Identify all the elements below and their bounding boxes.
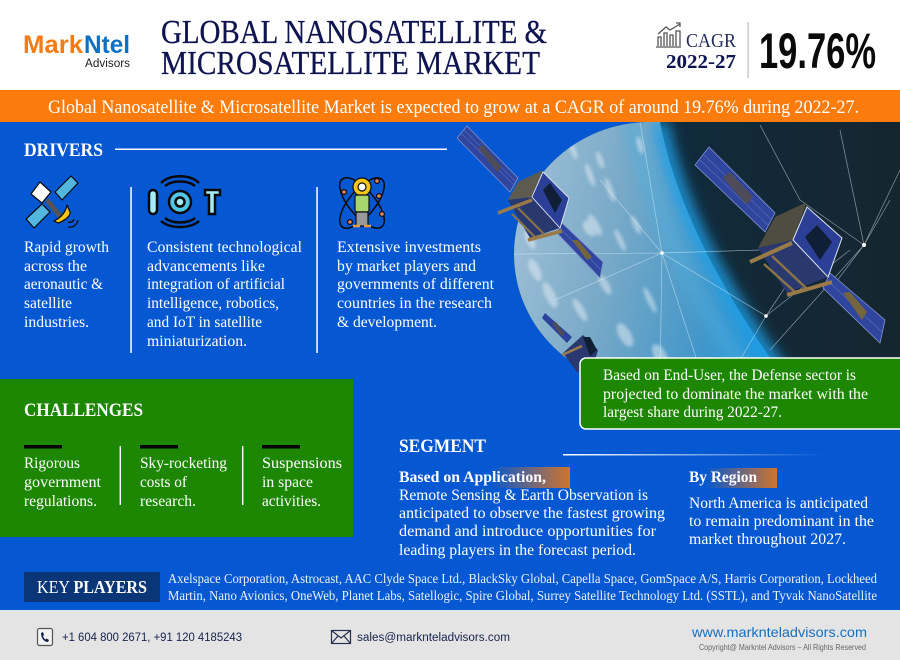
key players label: [24, 572, 160, 602]
driver text: investments: governments of different: [337, 276, 495, 293]
icon: growth chart: [656, 23, 681, 47]
segment: application: demand and introduce opportunities for: [399, 523, 657, 540]
icon: phone: [38, 628, 52, 646]
icon: person with atom orbit: [332, 171, 392, 235]
challenge: research costs: Sky-rocketing: [140, 455, 227, 472]
logo: MarkNtel Advisors: Mark: [23, 31, 83, 59]
orange banner: Global Nanosatellite & Microsatellite Market is expected to grow at a CAGR of around 19.76% during 2022-27.: [48, 98, 859, 118]
driver text: rapid growth: industries.: [24, 314, 89, 331]
key players list: [168, 572, 877, 604]
driver text: rapid growth: across the: [24, 258, 87, 275]
CAGR block: CAGR: [686, 30, 737, 52]
driver text: technological advancements: intelligence, robotics,: [147, 295, 279, 312]
driver text: rapid growth: Rapid growth: [24, 239, 109, 256]
segment: application: Based on Application,: [399, 469, 546, 486]
title: [161, 14, 547, 82]
driver text: rapid growth: aeronautic &: [24, 276, 104, 293]
footer: [0, 610, 900, 660]
challenge: regulations: Rigorous: [24, 455, 80, 472]
logo: MarkNtel Advisors: Ntel: [84, 31, 130, 59]
logo: MarkNtel Advisors: [23, 31, 130, 70]
key players label: KEY PLAYERS: [37, 577, 147, 597]
driver text: technological advancements: and IoT in satellite: [147, 314, 262, 331]
callout: end-user defense: Based on End-User, the Defense sector is: [603, 367, 856, 384]
footer: sales@marknteladvisors.com: [357, 632, 510, 644]
challenge: research costs: research.: [140, 493, 196, 510]
driver text: technological advancements: integration of artificial: [147, 276, 286, 293]
challenge: suspensions: activities.: [262, 493, 321, 510]
callout: end-user defense: [580, 358, 900, 429]
CAGR block: 2022-27: [666, 51, 736, 73]
orange banner: [0, 90, 900, 122]
icon: satellite: [26, 176, 78, 228]
driver text: technological advancements: miniaturization.: [147, 333, 247, 350]
satellite: small lower: [542, 313, 598, 372]
segment: application: Remote Sensing & Earth Observation is: [399, 487, 648, 504]
driver text: rapid growth: satellite: [24, 295, 72, 312]
segment: application: [399, 467, 665, 559]
challenge: research costs: costs of: [140, 474, 188, 491]
driver text: investments: countries in the research: [337, 295, 492, 312]
satellite: upper right: [695, 147, 885, 343]
driver text: investments: by market players and: [337, 258, 476, 275]
segment heading: SEGMENT: [399, 436, 486, 457]
driver text: technological advancements: [147, 239, 303, 350]
challenge: suspensions: Suspensions: [262, 455, 342, 472]
icon: IoT: [149, 176, 220, 227]
driver text: investments: & development.: [337, 314, 437, 331]
icon: envelope: [332, 630, 350, 644]
segment: region: [689, 468, 874, 548]
challenge: regulations: [24, 455, 102, 510]
challenge: suspensions: [262, 455, 342, 510]
driver text: rapid growth: [24, 239, 109, 331]
driver text: investments: Extensive investments: [337, 239, 481, 256]
logo: MarkNtel Advisors: Advisors: [85, 58, 130, 70]
segment: application: leading players in the forecast period.: [399, 542, 636, 559]
segment: application: anticipated to observe the fastest growing: [399, 505, 665, 522]
driver text: technological advancements: Consistent technological: [147, 239, 303, 256]
challenges heading: CHALLENGES: [24, 400, 143, 421]
footer: www.marknteladvisors.com: [691, 624, 867, 640]
challenge: research costs: [140, 455, 227, 510]
earth and space image: [514, 122, 900, 359]
segment: region: North America is anticipated: [689, 495, 868, 512]
challenge: regulations: regulations.: [24, 493, 97, 510]
callout: end-user defense: projected to dominate the market with the: [603, 386, 868, 403]
segment: region: to remain predominant in the: [689, 513, 874, 530]
callout: end-user defense: largest share during 2022-27.: [603, 404, 782, 421]
segment: region: market throughout 2027.: [689, 531, 846, 548]
CAGR block: [656, 22, 876, 79]
footer: +1 604 800 2671, +91 120 4185243: [62, 632, 242, 644]
segment: region: By Region: [689, 469, 757, 486]
satellite: upper left: [457, 126, 603, 278]
footer: Copyright@ Markntel Advisors – All Rights Reserved: [699, 643, 866, 652]
title: GLOBAL NANOSATELLITE &: [161, 14, 547, 51]
panel: challenges: [0, 379, 353, 537]
challenge: regulations: government: [24, 474, 102, 491]
challenge: suspensions: in space: [262, 474, 313, 491]
driver text: technological advancements: advancements like: [147, 258, 265, 275]
drivers heading: DRIVERS: [24, 140, 103, 161]
driver text: investments: [337, 239, 495, 331]
title: MICROSATELLITE MARKET: [161, 45, 540, 82]
